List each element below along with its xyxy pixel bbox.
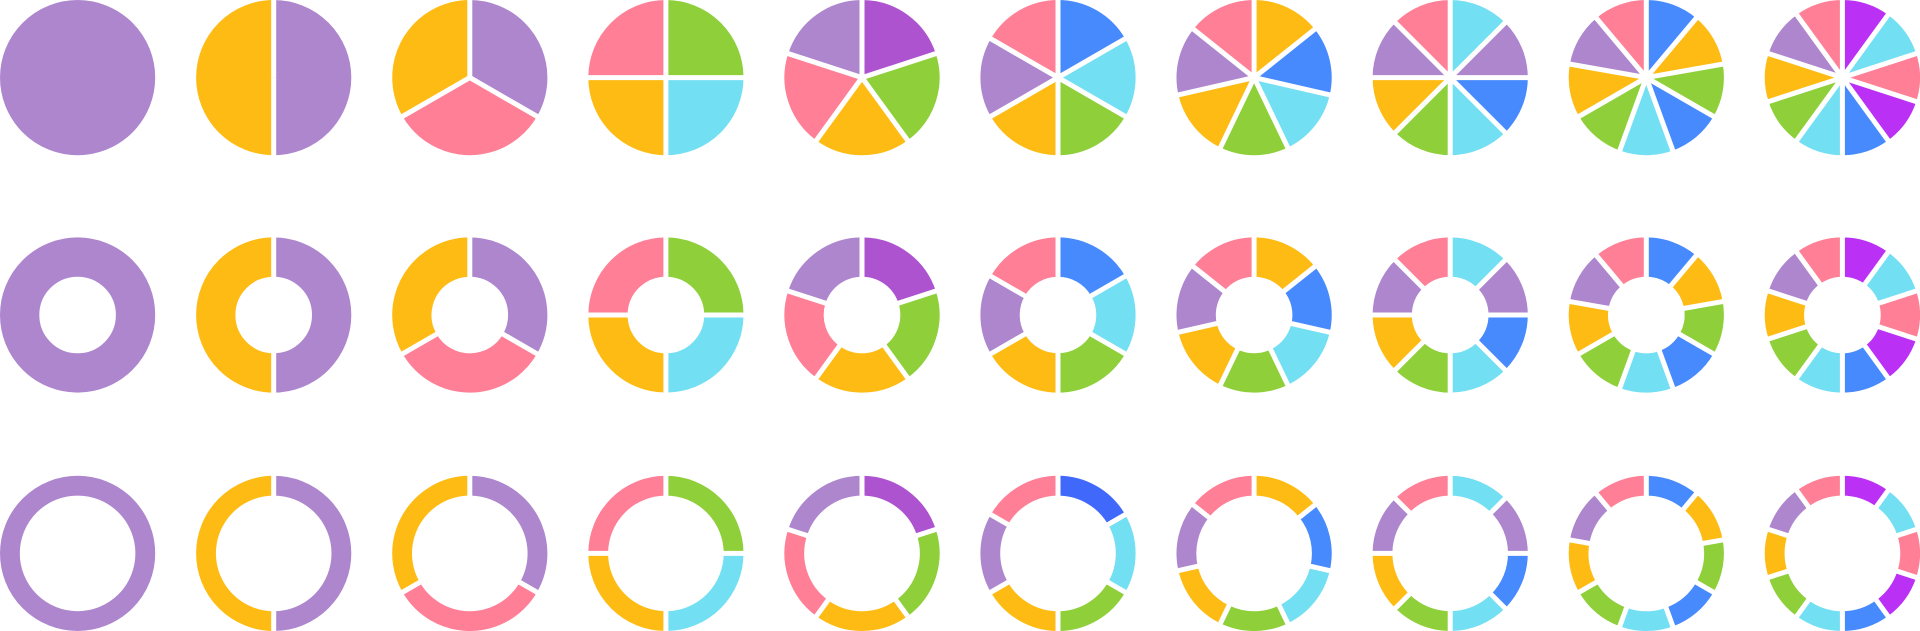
donut chart: 6 segments: [979, 236, 1137, 394]
pie chart: 5 segments: [787, 0, 937, 142]
pie chart: 2 segments: [235, 0, 312, 157]
ring chart: 4 segments: [587, 474, 745, 631]
row: solid pie charts: [39, 0, 1918, 157]
donut chart: 10 segments: [1761, 234, 1920, 396]
ring chart: 7 segments: [1159, 458, 1349, 631]
donut chart: 8 segments: [1368, 233, 1532, 397]
pie chart: 10 segments: [1767, 0, 1918, 157]
donut chart: 3 segments: [391, 236, 549, 394]
donut chart: 2 segments: [216, 236, 332, 394]
ring chart: 8 segments: [1354, 458, 1546, 631]
pie chart: 8 segments: [1371, 0, 1529, 157]
pie chart: 4 segments: [587, 0, 745, 157]
donut chart: 7 segments: [1173, 234, 1336, 396]
ring chart: 3 segments: [377, 461, 562, 631]
ring chart: 6 segments: [966, 461, 1150, 631]
ring chart: 5 segments: [767, 459, 957, 631]
pie chart: 6 segments: [990, 0, 1126, 157]
pie chart: 1 segment: [39, 39, 116, 116]
pie chart: 9 segments: [1569, 0, 1724, 152]
ring chart: 10 segments: [1748, 459, 1920, 631]
donut chart: 1 segment: [20, 257, 136, 373]
row: thin ring charts: [10, 458, 1920, 631]
pie chart: 3 segments: [401, 0, 538, 131]
ring chart: 9 segments: [1551, 458, 1742, 631]
donut chart: 5 segments: [781, 234, 943, 396]
row: thick donut charts: [20, 233, 1920, 397]
ring chart: 2 segments: [206, 474, 341, 631]
donut chart: 9 segments: [1565, 233, 1728, 397]
donut chart: 4 segments: [587, 236, 745, 394]
ring chart: 1 segment: [10, 486, 145, 621]
pie chart: 7 segments: [1177, 0, 1331, 149]
